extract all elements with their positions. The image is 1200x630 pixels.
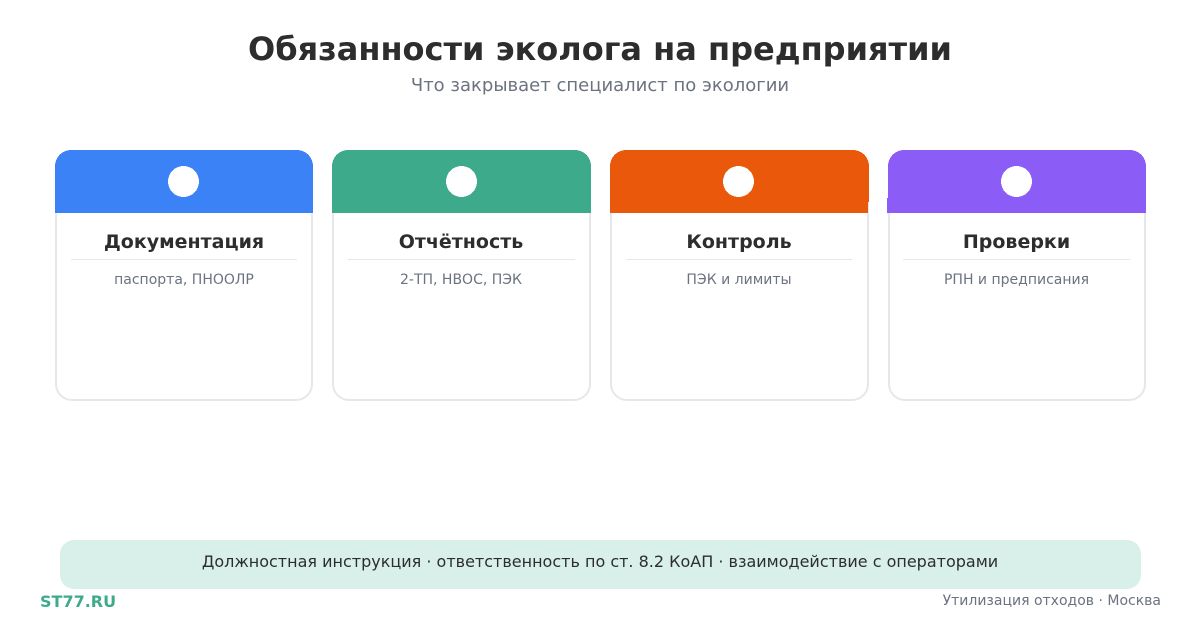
panel: Отчётность: 2-ТП, НВОС, ПЭК (400, 272, 522, 288)
title: Обязанности эколога на предприятии (248, 30, 952, 68)
panel: Контроль (610, 150, 869, 400)
panel: Отчётность (332, 150, 591, 400)
panel: Документация (55, 150, 313, 400)
subtitle: Что закрывает специалист по экологии (411, 75, 789, 96)
panel: Проверки (887, 150, 1146, 400)
callout: Должностная инструкция · ответственность по ст. 8.2 КоАП · взаимодействие с операторами (202, 552, 998, 571)
panel: Отчётность: Отчётность (399, 231, 523, 253)
brand: ST77.RU (40, 592, 116, 611)
panel: Контроль: Контроль (686, 231, 792, 253)
panel: Документация: паспорта, ПНООЛР (114, 272, 254, 288)
callout (60, 540, 1141, 589)
panel: Контроль: ПЭК и лимиты (686, 272, 792, 288)
footer note: Утилизация отходов · Москва (943, 593, 1161, 609)
panel: Проверки: РПН и предписания (944, 272, 1089, 288)
panel: Проверки: Проверки (963, 231, 1070, 253)
panel: Документация: Документация (104, 231, 264, 253)
